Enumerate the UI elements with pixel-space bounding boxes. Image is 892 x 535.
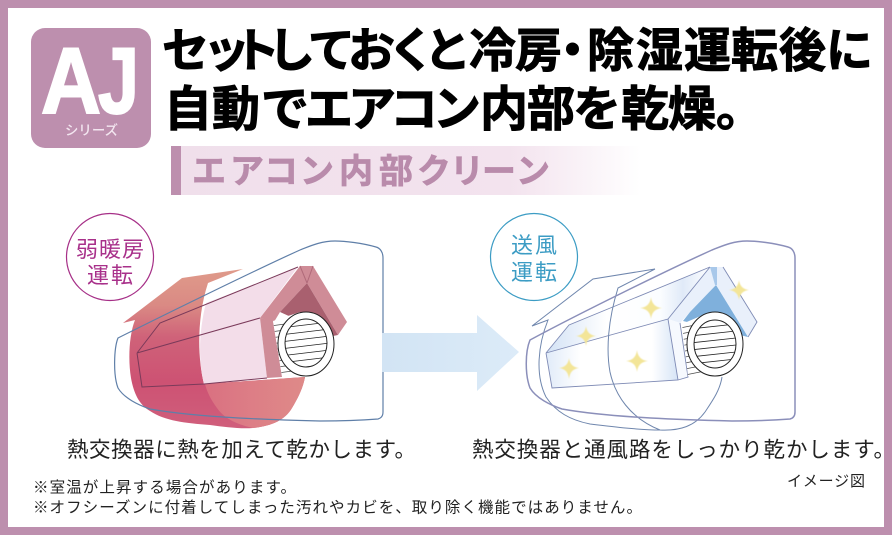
airflow outline — [532, 269, 722, 430]
fan ring — [687, 312, 743, 376]
heat exchanger top — [546, 267, 710, 353]
footnotes: ※室温が上昇する場合があります。 — [33, 478, 296, 496]
title — [162, 24, 873, 136]
caption right: 熱交換器と通風路をしっかり乾かします。 — [472, 438, 892, 462]
unit casing outline — [526, 241, 795, 421]
AJ series badge: シリーズ — [65, 122, 118, 138]
left illustration: heating operation — [115, 241, 383, 428]
badge: fan operation: 運転 — [511, 260, 557, 285]
badge: low heat operation: 弱暖房 — [76, 237, 144, 262]
warm air wrap — [123, 269, 305, 428]
AJ series badge: A — [41, 28, 101, 133]
heat exchanger outline — [137, 267, 298, 387]
footnotes — [33, 478, 642, 516]
hatched cylinder — [273, 312, 300, 376]
AJ series badge — [31, 28, 151, 148]
fan ring — [278, 312, 334, 376]
heat exchanger front — [546, 319, 678, 388]
image note: イメージ図 — [787, 473, 865, 490]
subtitle band — [171, 146, 641, 195]
caption left: 熱交換器に熱を加えて乾かします。 — [67, 438, 416, 462]
subtitle band: エアコン内部クリーン — [192, 153, 550, 191]
AJ series badge: J — [98, 28, 139, 133]
title: セットしておくと冷房・除湿運転後に — [162, 24, 873, 77]
unit casing outline — [115, 241, 383, 421]
exchanger end panels — [260, 266, 347, 335]
hatched cylinder — [682, 312, 710, 376]
exchanger end panels — [668, 267, 757, 337]
badge: low heat operation — [66, 214, 154, 300]
footnotes: ※オフシーズンに付着してしまった汚れやカビを、取り除く機能ではありません。 — [33, 498, 642, 516]
pale heat exchanger — [200, 268, 297, 384]
sparkles — [559, 280, 749, 379]
right illustration: fan operation — [526, 241, 795, 430]
badge: low heat operation: 運転 — [87, 263, 133, 288]
badge: fan operation: 送風 — [511, 233, 557, 258]
arrow — [382, 315, 519, 391]
badge: fan operation — [490, 214, 578, 300]
warm air lower lit part — [205, 377, 305, 428]
title: 自動でエアコン内部を乾燥。 — [164, 84, 764, 136]
